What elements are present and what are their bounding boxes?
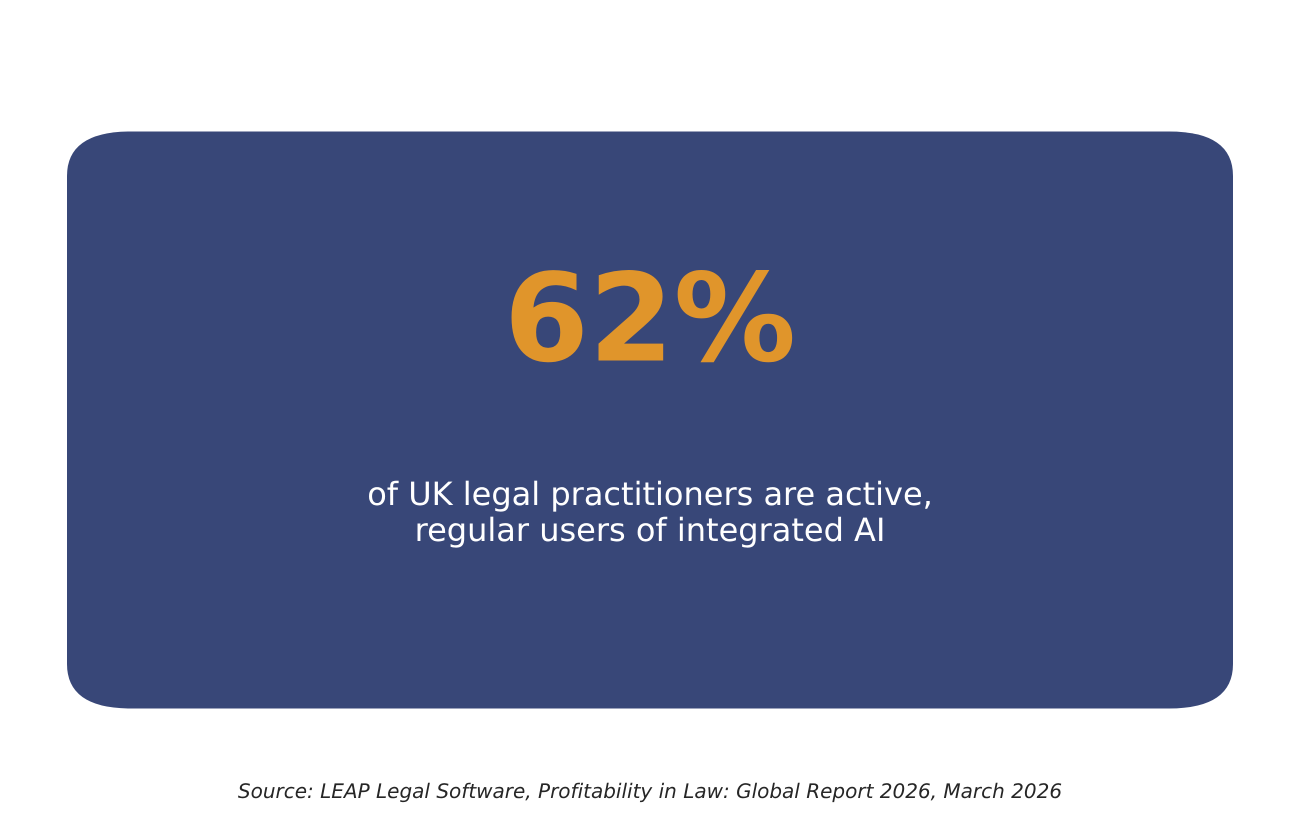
description text: regular users of integrated AI bbox=[415, 511, 885, 549]
panel: statistic card bbox=[67, 132, 1233, 708]
source note: Source: LEAP Legal Software, Profitability in Law: Global Report 2026, March 2026 bbox=[238, 779, 1062, 803]
headline statistic: 62% bbox=[504, 248, 796, 390]
description text: of UK legal practitioners are active, bbox=[367, 475, 933, 513]
